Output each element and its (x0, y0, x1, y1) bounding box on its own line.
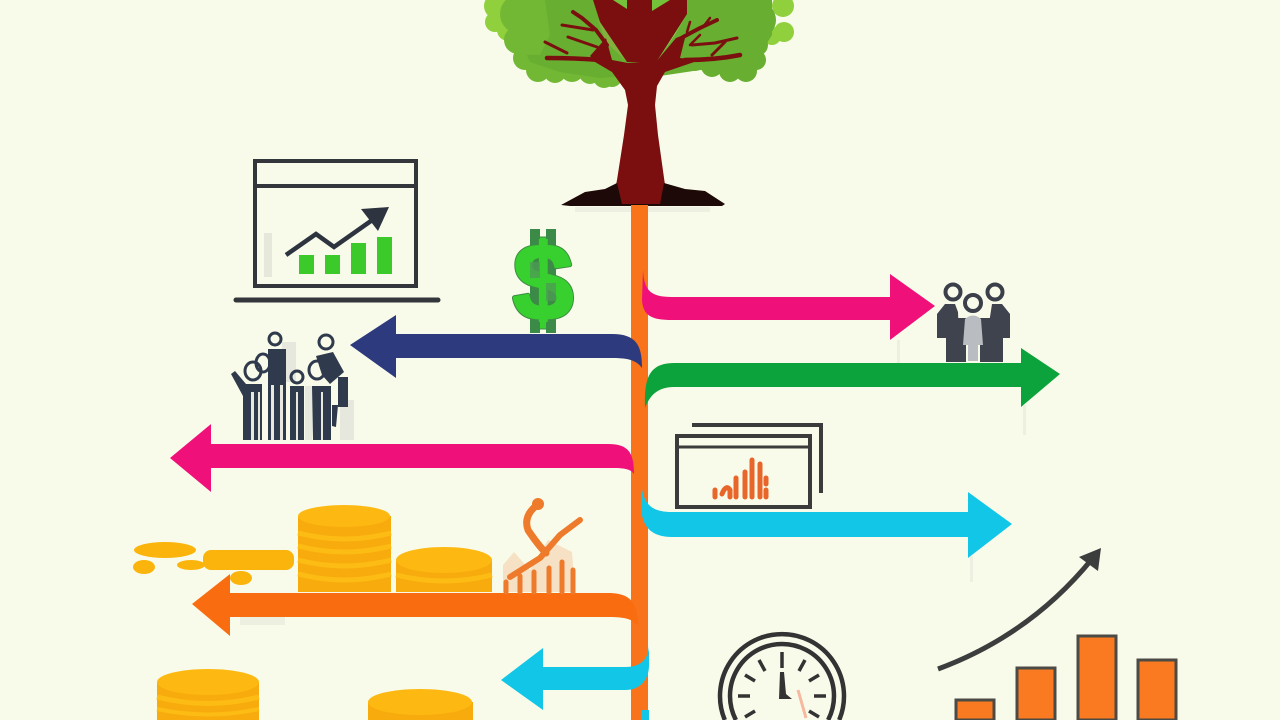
tree (484, 0, 794, 206)
orange bars (715, 460, 766, 497)
icon: laptop chart (236, 161, 438, 300)
head rings (245, 333, 333, 383)
icon: group of people right (937, 284, 1010, 362)
icon: dollar sign: $ (513, 221, 573, 342)
gaps between branches (597, 18, 627, 62)
bodies (231, 349, 348, 440)
tree canopy (484, 0, 794, 88)
soil mound (561, 183, 725, 206)
arrow: pink left (170, 424, 634, 492)
shirt stripes (251, 385, 323, 440)
icon: clock (720, 634, 844, 720)
icon: coin stack medium (396, 547, 492, 592)
icon: flame and rising chart (503, 498, 580, 592)
trend arrow (286, 207, 389, 255)
tree trunk and branches (545, 0, 740, 205)
arrow: central orange stem (631, 205, 648, 720)
green bars (299, 237, 392, 274)
soft shadows under arrows (240, 207, 1026, 625)
arrow: growth curve (938, 548, 1101, 669)
arrow: cyan small left (501, 644, 649, 710)
icon: scattered coins (133, 542, 294, 585)
arrow: cyan stub at the bottom of the stem (641, 710, 649, 720)
bar chart (956, 636, 1176, 720)
icon: dollar sign: $ (513, 221, 573, 342)
icon: coin stack bottom centre (368, 689, 473, 720)
arrow: green right (645, 348, 1060, 408)
arrow: pink right (642, 270, 935, 340)
arrow: navy left (350, 315, 642, 378)
icon: coin stack bottom left (157, 669, 259, 720)
arrow: cyan right (641, 482, 1012, 558)
arrow: orange left (192, 574, 638, 636)
icon: framed bar chart (677, 425, 821, 507)
icon: coin stack large (298, 505, 391, 592)
icon: group of people left (231, 333, 354, 440)
